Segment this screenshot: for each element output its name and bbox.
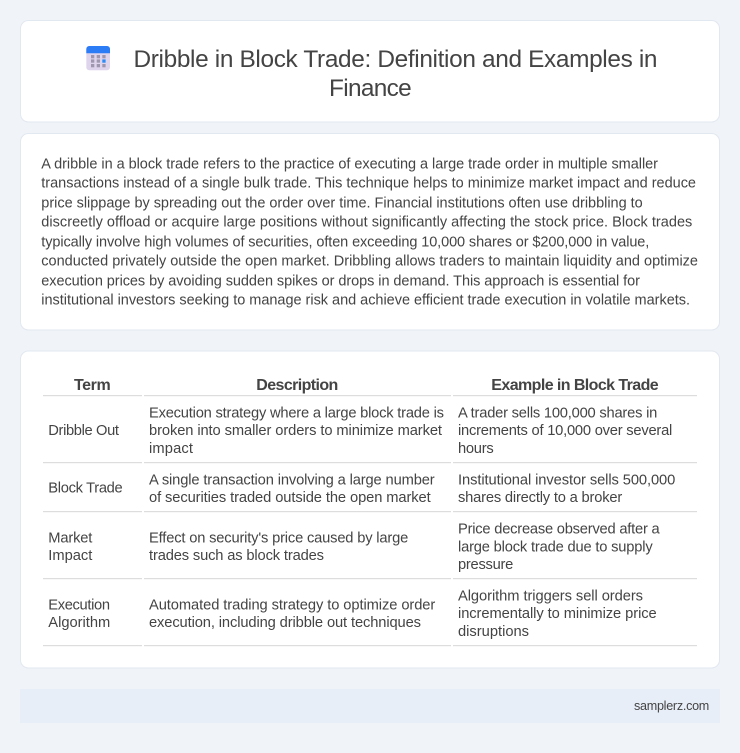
table row: Market Impact: Market [48,530,92,546]
table row: Market Impact: large block trade due to supply [458,539,653,555]
table row: Block Trade: Block Trade [48,481,123,497]
table row: Market Impact: pressure [458,557,513,573]
table row: Execution Algorithm: incrementally to minimize price [458,606,657,622]
text block: definition of dribble: A dribble in a block trade refers to the practice of executing a large trade order in multiple smaller [41,156,658,172]
panel: title card [20,20,720,122]
title: Dribble in Block Trade: Definition and Examples in [134,46,658,73]
table row: Dribble Out: Execution strategy where a large block trade is [149,405,444,421]
text block: definition of dribble: institutional investors seeking to manage risk and achieve efficient trade execution in volatile markets. [41,292,690,308]
table header [43,377,697,396]
table header: Description [256,377,338,394]
table row: Execution Algorithm [43,588,697,646]
table row: Block Trade: Institutional investor sells 500,000 [458,472,675,488]
table row: Dribble Out: hours [458,441,494,457]
table row: Block Trade: A single transaction involving a large number [149,472,435,488]
table row: Execution Algorithm: Algorithm triggers sell orders [458,588,643,604]
text block: definition of dribble: execution prices by avoiding sudden spikes or drops in demand. This approach is essential for [41,273,640,289]
table row: Dribble Out: A trader sells 100,000 shares in [458,405,657,421]
table row: Dribble Out: broken into smaller orders to minimize market [149,423,442,439]
table row: Dribble Out: increments of 10,000 over several [458,423,672,439]
text block: definition of dribble: transactions instead of a single bulk trade. This technique helps to minimize market impact and reduce [41,175,696,191]
title: Finance [329,75,412,102]
table row: Block Trade: of securities traded outside the open market [149,490,431,506]
table row: Dribble Out: impact [149,441,193,457]
footer [20,689,720,723]
table row: Execution Algorithm: disruptions [458,624,529,640]
text block: definition of dribble: typically involve high volumes of securities, often exceeding 10,000 shares or $200,000 in value, [41,234,649,250]
table row: Block Trade: shares directly to a broker [458,490,622,506]
table row: Dribble Out [43,405,697,463]
icon: calendar [86,46,110,70]
table row: Execution Algorithm: execution, including dribble out techniques [149,615,421,631]
panel: terms table [20,351,720,668]
footer: samplerz.com [634,699,709,713]
table row: Execution Algorithm: Algorithm [48,615,110,631]
table row: Market Impact [43,521,697,579]
table row: Block Trade [43,472,697,512]
table row: Execution Algorithm: Automated trading strategy to optimize order [149,597,435,613]
text block: definition of dribble [41,156,698,308]
text block: definition of dribble: price slippage by spreading out the order over time. Financial institutions often use dribbling to [41,195,643,211]
table header: Example in Block Trade [491,377,659,394]
title [134,46,658,102]
text block: definition of dribble: conducted privately outside the open market. Dribbling allows traders to maintain liquidity and optimize [41,253,698,269]
text block: definition of dribble: discreetly offload or acquire large positions without significantly affecting the stock price. Block trades [41,214,692,230]
table row: Market Impact: trades such as block trades [149,548,324,564]
table row: Market Impact: Impact [48,548,92,564]
table row: Market Impact: Effect on security's price caused by large [149,530,408,546]
panel: summary paragraph [20,134,720,330]
table row: Market Impact: Price decrease observed after a [458,521,661,537]
table header: Term [74,377,111,394]
table row: Dribble Out: Dribble Out [48,423,119,439]
table row: Execution Algorithm: Execution [48,597,110,613]
